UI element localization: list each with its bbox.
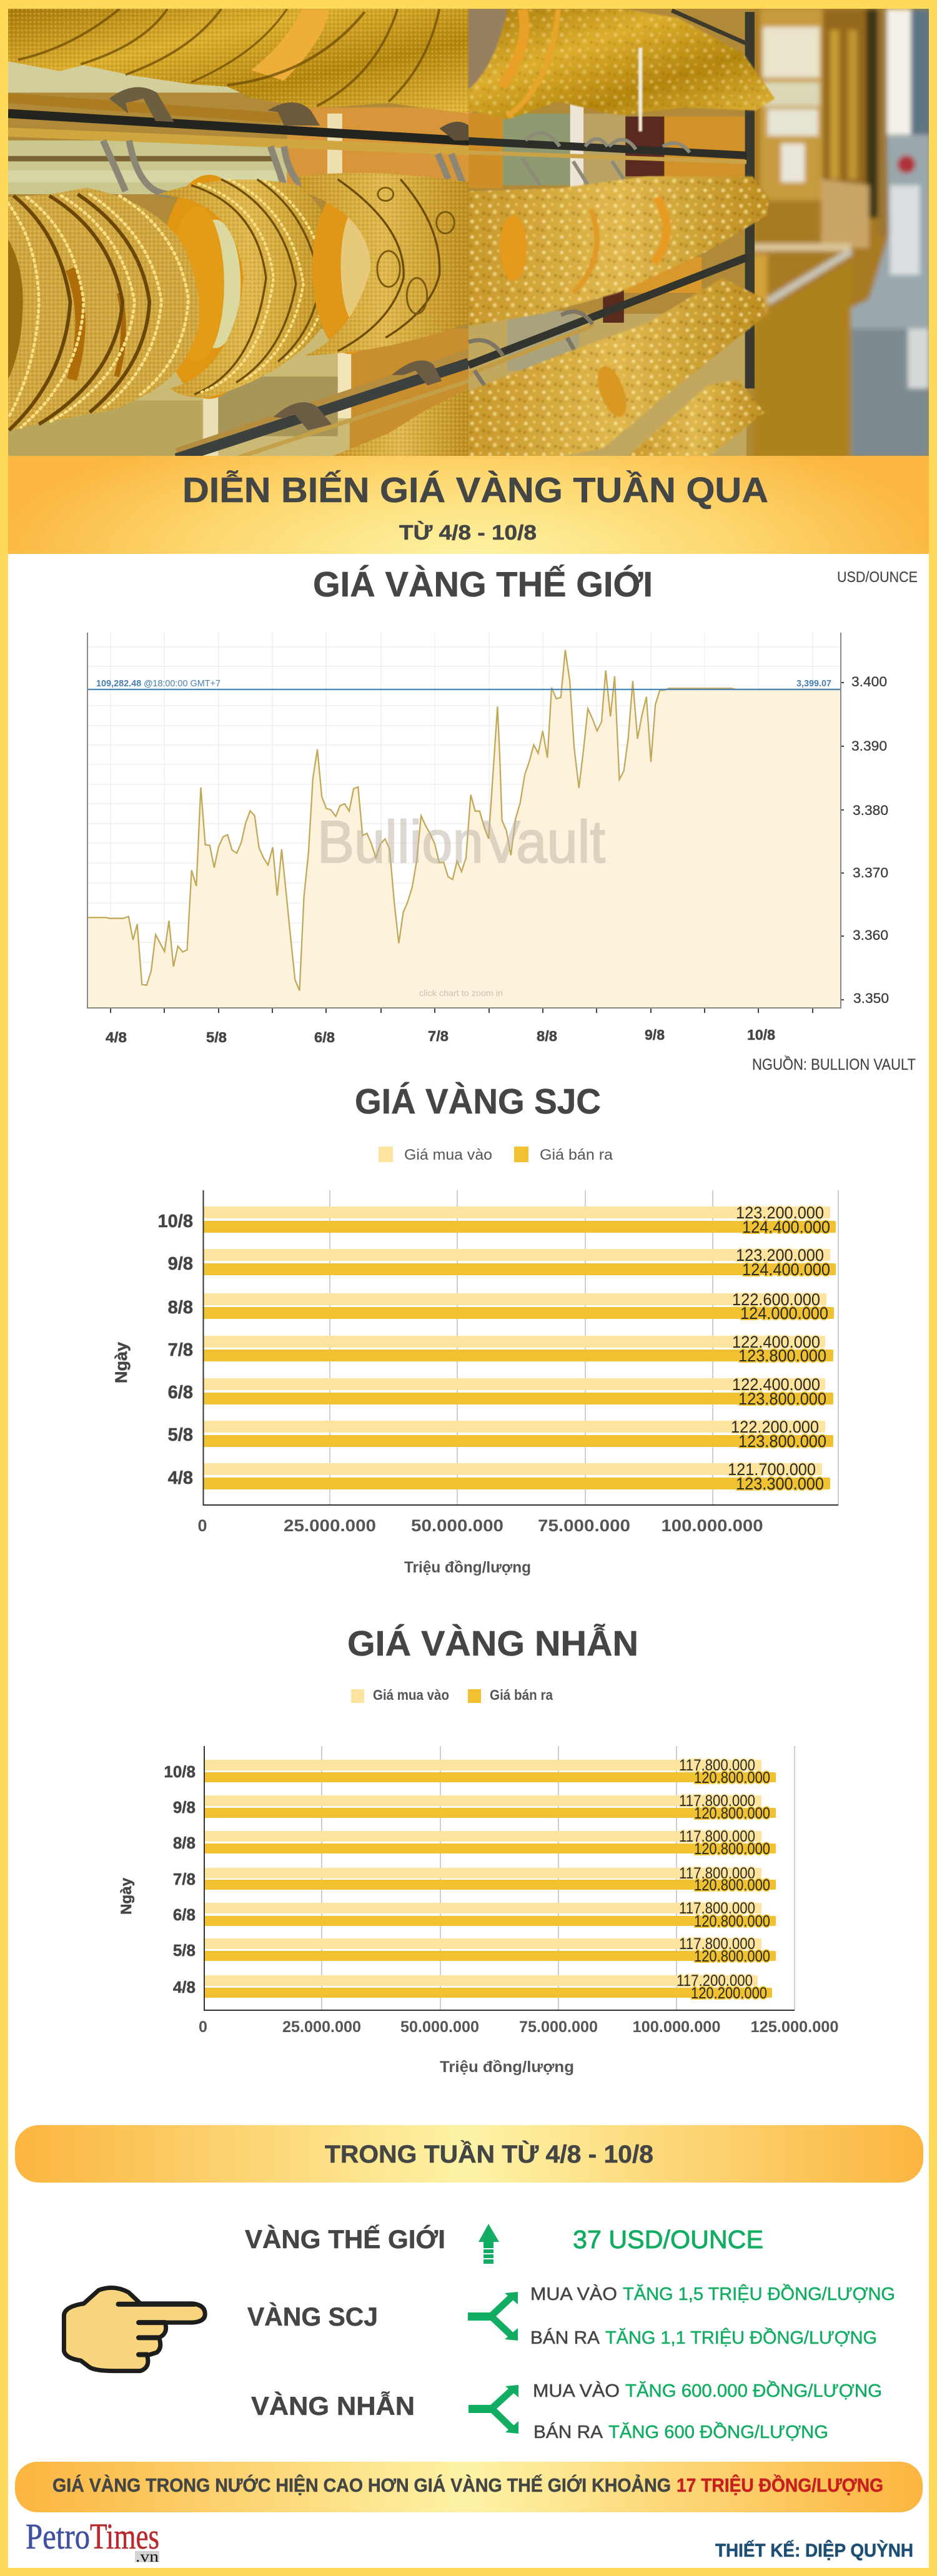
date labels: 7/8: [168, 1340, 193, 1360]
bars: 5/8: [204, 1935, 776, 1965]
x axis labels: 6/8: [314, 1029, 335, 1045]
y axis title: Ngày: [118, 1877, 135, 1915]
buy change: MUA VÀO: [530, 2284, 617, 2304]
date labels: 4/8: [173, 1978, 196, 1996]
photo: gold bangles on display rails: [8, 9, 932, 458]
x axis labels: 4/8: [106, 1029, 127, 1045]
area fill and price line: [87, 650, 841, 1008]
summary heading pill: TRONG TUẦN TỪ 4/8 - 10/8: [325, 2139, 653, 2168]
x axis labels: 25.000.000: [282, 2018, 361, 2036]
icon: fork arrow: [468, 2292, 518, 2341]
y axis title: Ngày: [112, 1342, 131, 1383]
date labels: 4/8: [168, 1468, 193, 1488]
date labels: 8/8: [168, 1298, 193, 1318]
bars: 4/8: [203, 1460, 830, 1493]
bars: 6/8: [203, 1375, 833, 1408]
icon: fork arrow: [468, 2385, 518, 2434]
heading: SJC gold price: GIÁ VÀNG SJC: [355, 1082, 601, 1122]
bars: 7/8: 122.400.000: [732, 1333, 820, 1351]
x axis labels: 25.000.000: [284, 1516, 376, 1535]
bars: 7/8: [204, 1865, 776, 1894]
x axis labels: 125.000.000: [751, 2018, 838, 2036]
title band: [8, 456, 929, 554]
axes: [204, 1746, 795, 2010]
y axis labels: [851, 674, 889, 1006]
x axis labels: 8/8: [537, 1028, 557, 1044]
unit label: USD/OUNCE: [837, 569, 918, 586]
legend: ring gold: [351, 1687, 553, 1703]
conclusion pill: 17 TRIỆU ĐỒNG/LƯỢNG: [677, 2474, 883, 2496]
x axis labels: 50.000.000: [400, 2018, 479, 2036]
bars: 6/8: [204, 1900, 776, 1930]
source note: NGUỒN: BULLION VAULT: [752, 1055, 916, 1073]
date labels: 9/8: [173, 1798, 196, 1817]
bars: 6/8: 122.400.000: [732, 1375, 820, 1394]
row: ring gold: [251, 2380, 882, 2442]
row: world gold: VÀNG THẾ GIỚI: [245, 2224, 445, 2254]
row: SJC gold: TĂNG 1,1 TRIỆU ĐỒNG/LƯỢNG: [605, 2327, 877, 2348]
bars: 9/8: 124.400.000: [742, 1260, 830, 1279]
conclusion pill: [15, 2462, 923, 2512]
date range subtitle: TỪ 4/8 - 10/8: [399, 521, 537, 544]
y axis labels: 3.360: [853, 927, 888, 943]
date labels: [158, 1212, 193, 1488]
logo: PetroTimes: Times: [90, 2516, 159, 2557]
bars: 8/8: 122.600.000: [732, 1290, 820, 1309]
chart axes: [87, 633, 841, 1008]
legend: SJC: Giá mua vào: [404, 1147, 492, 1163]
bars: 4/8: 117.200.000: [677, 1972, 753, 1990]
zoom hint: click chart to zoom in: [419, 988, 503, 998]
icon: up arrow: [478, 2224, 499, 2264]
designer credit: THIẾT KẾ: DIỆP QUỲNH: [715, 2540, 913, 2561]
bars: 8/8: [204, 1828, 776, 1858]
date labels: 9/8: [168, 1254, 193, 1274]
bars: 6/8: 117.800.000: [679, 1900, 755, 1917]
bars: 9/8: 120.800.000: [694, 1805, 770, 1822]
logo: PetroTimes: Petro: [26, 2516, 90, 2557]
date labels: 10/8: [164, 1762, 196, 1781]
row: world gold: [245, 2224, 763, 2264]
heading: world gold price: GIÁ VÀNG THẾ GIỚI: [313, 564, 653, 605]
y axis labels: 3.350: [853, 990, 889, 1006]
x axis title: Triệu đồng/lượng: [404, 1559, 531, 1576]
row: SJC gold: VÀNG SCJ: [247, 2302, 378, 2331]
main title: DIỄN BIẾN GIÁ VÀNG TUẦN QUA: [182, 470, 768, 510]
icon: pointing hand: [64, 2287, 205, 2371]
y axis labels: 3.400: [851, 674, 887, 689]
x axis labels: 10/8: [747, 1027, 775, 1043]
bars: 10/8: 117.800.000: [679, 1757, 755, 1774]
row: ring gold: TĂNG 600 ĐỒNG/LƯỢNG: [608, 2421, 828, 2442]
legend: ring gold: Giá bán ra: [490, 1687, 553, 1703]
current value label: 3,399.07: [796, 678, 831, 689]
bars: 8/8: [203, 1290, 834, 1323]
bars: 8/8: 120.800.000: [694, 1840, 770, 1858]
bars: 10/8: [203, 1203, 836, 1236]
logo: PetroTimes: .vn: [136, 2549, 159, 2565]
row: SJC gold: [247, 2283, 895, 2348]
legend: ring gold: Giá mua vào: [373, 1687, 449, 1703]
legend: SJC: Giá bán ra: [540, 1147, 613, 1163]
bars: 6/8: 123.800.000: [738, 1389, 826, 1408]
bar chart: ring gold price: [118, 1746, 838, 2076]
sell change: BÁN RA: [530, 2327, 600, 2348]
bars: 4/8: 123.300.000: [736, 1474, 824, 1493]
value: 37 USD/OUNCE: [573, 2225, 763, 2254]
summary heading pill: [15, 2125, 923, 2183]
conclusion pill: GIÁ VÀNG TRONG NƯỚC HIỆN CAO HƠN GIÁ VÀNG THẾ GIỚI KHOẢNG: [52, 2474, 671, 2496]
bars: 7/8: 120.800.000: [694, 1877, 770, 1894]
date labels: 6/8: [173, 1905, 196, 1924]
bars: 8/8: 124.000.000: [740, 1304, 828, 1323]
line chart: world gold price: [87, 633, 889, 1045]
legend: SJC: [379, 1147, 613, 1163]
bars: 10/8: 120.800.000: [694, 1769, 770, 1787]
bars: 7/8: [203, 1333, 833, 1365]
bars: 10/8: 124.400.000: [742, 1218, 830, 1236]
bars: 4/8: [204, 1972, 772, 2002]
x axis labels: 0: [197, 1516, 207, 1535]
row: SJC gold: TĂNG 1,5 TRIỆU ĐỒNG/LƯỢNG: [623, 2283, 895, 2304]
bars: 9/8: 123.200.000: [736, 1246, 824, 1265]
heading: ring gold price: GIÁ VÀNG NHẪN: [347, 1623, 638, 1664]
x axis labels: 100.000.000: [661, 1516, 763, 1535]
y axis labels: 3.380: [853, 802, 888, 818]
row: ring gold: VÀNG NHẪN: [251, 2391, 415, 2421]
axes: [204, 1190, 838, 1505]
x axis labels: 7/8: [428, 1028, 449, 1044]
bar chart: SJC gold price: [112, 1190, 838, 1576]
bars: 4/8: 121.700.000: [728, 1460, 816, 1479]
x axis labels: 100.000.000: [632, 2018, 721, 2036]
date labels: 5/8: [173, 1941, 196, 1960]
x axis labels: 75.000.000: [538, 1516, 630, 1535]
date labels: 6/8: [168, 1383, 193, 1403]
x axis labels: [199, 2018, 838, 2036]
x axis labels: [197, 1516, 763, 1535]
current price line: [87, 689, 841, 690]
x axis labels: 9/8: [645, 1027, 665, 1043]
date labels: 7/8: [173, 1870, 196, 1888]
logo: PetroTimes: [26, 2516, 159, 2565]
bars: 5/8: 122.200.000: [731, 1418, 819, 1436]
bars: 10/8: 123.200.000: [736, 1203, 824, 1222]
bars: 5/8: 123.800.000: [738, 1432, 826, 1451]
bars: 10/8: [204, 1757, 776, 1787]
bars: 4/8: 120.200.000: [691, 1985, 767, 2002]
watermark: BullionVault: [317, 809, 605, 876]
row: ring gold: TĂNG 600.000 ĐỒNG/LƯỢNG: [625, 2380, 882, 2401]
x axis title: Triệu đồng/lượng: [440, 2058, 574, 2076]
date labels: [164, 1762, 196, 1996]
bars: 9/8: 117.800.000: [679, 1792, 755, 1810]
x axis labels: 75.000.000: [519, 2018, 598, 2036]
date labels: 8/8: [173, 1833, 196, 1852]
x axis labels: 0: [199, 2018, 207, 2036]
bars: 7/8: 117.800.000: [679, 1865, 755, 1882]
date labels: 5/8: [168, 1425, 193, 1445]
sell change: BÁN RA: [533, 2422, 603, 2442]
y axis labels: 3.390: [851, 738, 887, 754]
bars: 7/8: 123.800.000: [738, 1346, 826, 1365]
bars: 5/8: 120.800.000: [694, 1948, 770, 1965]
bars: 8/8: 117.800.000: [679, 1828, 755, 1845]
x axis labels: 5/8: [206, 1029, 227, 1045]
x axis labels: [106, 1027, 775, 1045]
bars: 5/8: 117.800.000: [679, 1935, 755, 1953]
date labels: 10/8: [158, 1212, 193, 1231]
bars: 9/8: [204, 1792, 776, 1822]
bars: 6/8: 120.800.000: [694, 1913, 770, 1930]
buy change: MUA VÀO: [533, 2381, 620, 2401]
bars: 5/8: [203, 1418, 833, 1451]
bars: 9/8: [203, 1246, 836, 1279]
current point label: 109,282.48 @18:00:00 GMT+7: [96, 678, 221, 689]
y axis labels: 3.370: [853, 865, 888, 881]
x axis labels: 50.000.000: [411, 1516, 503, 1535]
